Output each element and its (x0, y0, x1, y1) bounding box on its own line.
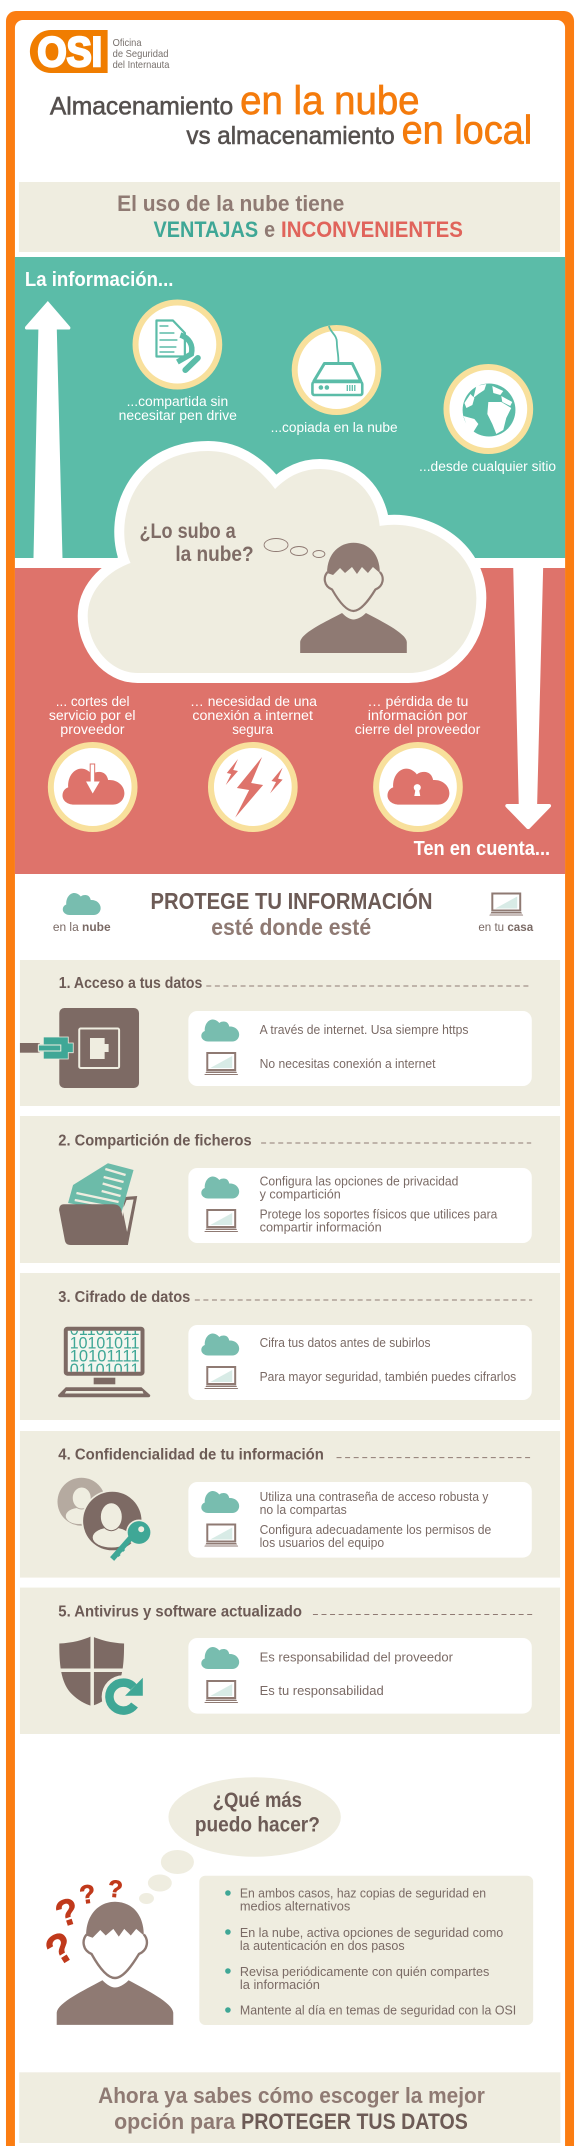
caption: pérdida (355, 693, 481, 737)
banner: ventajas e inconvenientes: e (264, 217, 275, 242)
bullet list: medios alternativos (240, 1899, 350, 1913)
caption: pérdida: información por (368, 707, 468, 723)
caption: necesidad: conexión a internet (192, 707, 313, 723)
panel: 1 acceso a tus datos: A través de internet. Usa siempre https (260, 1023, 468, 1037)
bullet list: la información (240, 1978, 320, 1992)
panel: 4 confidencialidad: 4. Confidencialidad de tu información (58, 1447, 324, 1464)
icon: monitor with binary: 01101011 (70, 1321, 140, 1339)
panel: 2 compartición de ficheros (20, 1116, 560, 1263)
cloud question (140, 520, 254, 566)
caption: cortes: proveedor (60, 721, 125, 737)
panel: 3 cifrado de datos: Cifra tus datos antes de subirlos (260, 1336, 431, 1350)
panel: 1 acceso a tus datos (20, 960, 560, 1106)
question marks: ? (78, 1880, 97, 1910)
question marks: ? (50, 1889, 84, 1936)
panel: 5 antivirus: Es responsabilidad del proveedor (260, 1650, 453, 1665)
cloud question: ¿Lo subo a (140, 520, 236, 543)
panel: 4 confidencialidad: los usuarios del equipo (260, 1536, 384, 1550)
heading: protege tu información: esté donde esté (211, 914, 371, 940)
logo: OSI: OSI (37, 28, 102, 75)
person thinking (300, 543, 407, 653)
panel: 4 confidencialidad: Utiliza una contraseña de acceso robusta y (260, 1490, 489, 1504)
icon: globe (446, 367, 530, 451)
white band between panels (15, 558, 565, 568)
closing banner: PROTEGER TUS DATOS (241, 2109, 468, 2134)
panel: 4 confidencialidad: Configura adecuadamente los permisos de (260, 1523, 491, 1537)
heading: protege tu información (150, 888, 433, 940)
panel: 2 compartición de ficheros: Protege los soportes físicos que utilices para (260, 1208, 497, 1222)
speech bubble: qué más puedo hacer: puedo hacer? (195, 1814, 320, 1837)
heading: la información: La información... (25, 269, 173, 291)
legend: en tu casa (478, 894, 533, 934)
icon: monitor with binary: 01101011 (70, 1361, 140, 1379)
icon: monitor with binary: 10101111 (70, 1348, 140, 1366)
panel: 4 confidencialidad (20, 1431, 560, 1578)
panel: 2 compartición de ficheros: compartir información (260, 1221, 382, 1235)
caption: cortes: ... cortes del (56, 693, 130, 709)
panel: 5 antivirus: Es tu responsabilidad (260, 1684, 384, 1698)
panel: 3 cifrado de datos (20, 1273, 560, 1420)
central cloud (88, 451, 476, 673)
panel: inconvenientes (15, 568, 565, 874)
icon: monitor with binary: 10101011 (70, 1334, 140, 1352)
banner: ventajas e inconvenientes: El uso de la nube tiene (117, 191, 344, 216)
closing banner: Ahora ya sabes cómo escoger la mejor (98, 2083, 485, 2108)
caption: copiada: ...copiada en la nube (271, 419, 398, 435)
title: en local (402, 108, 532, 153)
title: vs almacenamiento (186, 122, 395, 150)
icon: ethernet plug (20, 1008, 139, 1088)
icon: lightning (211, 745, 295, 829)
logo: OSI: de Seguridad (113, 49, 168, 60)
caption: necesidad: segura (232, 721, 273, 737)
title: en la nube (240, 79, 420, 123)
panel: 2 compartición de ficheros: Configura las opciones de privacidad (260, 1174, 458, 1189)
caption: pérdida: … pérdida de tu (367, 693, 468, 709)
bullet list: En ambos casos, haz copias de seguridad en (240, 1886, 486, 1901)
icon: cloud lock (376, 745, 460, 829)
caption: pérdida: cierre del proveedor (355, 721, 481, 737)
speech bubble: qué más puedo hacer: ¿Qué más (213, 1789, 302, 1812)
heading: protege tu información: PROTEGE TU INFORMACIÓN (150, 888, 433, 914)
panel: ventajas (15, 257, 565, 558)
logo: OSI: Oficina (113, 38, 142, 49)
bullet list: En la nube, activa opciones de seguridad como (240, 1926, 503, 1940)
arrow down (505, 568, 551, 829)
caption: necesidad: … necesidad de una (190, 693, 317, 709)
banner: ventajas e inconvenientes: VENTAJAS (153, 217, 258, 242)
icon: users and key (58, 1478, 152, 1559)
panel: 3 cifrado de datos: Para mayor seguridad, también puedes cifrarlos (260, 1370, 516, 1384)
caption: cortes (49, 693, 136, 737)
legend: en la nube (53, 893, 111, 934)
caption: compartida: necesitar pen drive (119, 407, 237, 423)
heading: ten en cuenta: Ten en cuenta... (414, 838, 550, 860)
logo: OSI (30, 28, 170, 75)
question marks: ? (107, 1875, 124, 1904)
legend: en tu casa: en tu casa (478, 920, 533, 934)
banner: ventajas e inconvenientes: INCONVENIENTES (281, 217, 463, 242)
bullet list: Mantente al día en temas de seguridad con la OSI (240, 2003, 516, 2018)
title: Almacenamiento (50, 92, 233, 121)
icon: cloud download (51, 745, 135, 829)
icon: folder (59, 1163, 137, 1245)
panel: 2 compartición de ficheros: 2. Compartición de ficheros (58, 1132, 252, 1150)
bullet list: la autenticación en dos pasos (240, 1939, 405, 1953)
caption: necesidad (190, 693, 317, 737)
icon: shield with refresh (57, 1634, 145, 1718)
icon: monitor with binary (58, 1321, 150, 1397)
logo: OSI: del Internauta (113, 60, 170, 71)
icon: shared document (136, 302, 219, 386)
thought bubbles (264, 538, 325, 558)
question marks: ? (37, 1922, 83, 1975)
closing banner (19, 2072, 560, 2143)
panel: 5 antivirus: 5. Antivirus y software actualizado (58, 1603, 302, 1621)
person with doubts (57, 1902, 173, 2025)
banner: ventajas e inconvenientes (19, 182, 560, 252)
question marks (37, 1875, 124, 1975)
cloud question: la nube? (175, 543, 254, 566)
caption: cortes: servicio por el (49, 707, 136, 723)
closing banner: opción para (114, 2109, 236, 2134)
bullet list: Revisa periódicamente con quién compartes (240, 1965, 489, 1979)
icon: router (295, 326, 378, 412)
panel: 1 acceso a tus datos: No necesitas conexión a internet (260, 1057, 436, 1071)
legend: en la nube: en la nube (53, 920, 111, 934)
panel: 2 compartición de ficheros: y compartición (260, 1188, 341, 1202)
panel: 1 acceso a tus datos: 1. Acceso a tus datos (59, 975, 202, 992)
thought bubbles (139, 1850, 194, 1904)
arrow up (25, 301, 70, 558)
panel: 5 antivirus (20, 1588, 560, 1734)
caption: compartida: ...compartida sin (127, 393, 228, 409)
caption: compartida (119, 393, 237, 423)
panel: 4 confidencialidad: no la compartas (260, 1503, 347, 1517)
caption: desde cualquier sitio: ...desde cualquier sitio (419, 458, 556, 474)
speech bubble: qué más puedo hacer (168, 1777, 341, 1857)
panel: 3 cifrado de datos: 3. Cifrado de datos (58, 1289, 190, 1306)
title (50, 79, 532, 153)
bullet list (199, 1876, 533, 2025)
